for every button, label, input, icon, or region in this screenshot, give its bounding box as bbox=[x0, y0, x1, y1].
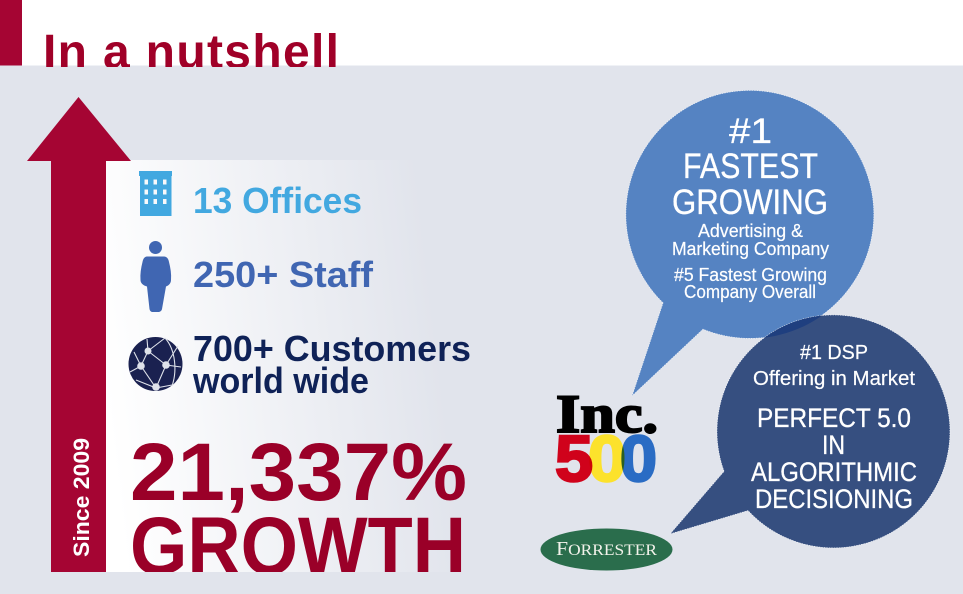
icon: person bbox=[140, 241, 171, 312]
heading: fastest growing: #1 bbox=[729, 112, 772, 151]
heading: perfect score: DECISIONING bbox=[755, 484, 913, 514]
speech bubble: Forrester bbox=[670, 315, 950, 548]
icon: globe bbox=[128, 337, 182, 391]
number 500: 0 bbox=[588, 422, 626, 495]
speech bubble: Inc 500 bbox=[626, 90, 874, 396]
text: award details bbox=[672, 221, 829, 302]
logo: Forrester: FORRESTER bbox=[556, 538, 657, 560]
logo: Inc. 500: Inc. bbox=[556, 384, 658, 444]
arrow: growth bbox=[27, 97, 131, 572]
text: DSP ranking bbox=[753, 342, 915, 390]
text: DSP ranking: #1 DSP bbox=[800, 342, 868, 364]
panel: growth stats bbox=[27, 97, 471, 592]
number 500: 5 bbox=[555, 422, 593, 495]
offices stat: 13 Offices bbox=[193, 180, 362, 221]
number 500 bbox=[555, 422, 657, 495]
heading: fastest growing: FASTEST bbox=[683, 147, 818, 186]
heading: fastest growing: GROWING bbox=[672, 183, 828, 222]
text: award details: Company Overall bbox=[684, 282, 816, 302]
heading: perfect score bbox=[751, 403, 917, 514]
growth figure: GROWTH bbox=[130, 501, 466, 592]
text: award details: #5 Fastest Growing bbox=[674, 265, 827, 285]
heading: perfect score: IN bbox=[822, 430, 845, 460]
title block bbox=[0, 0, 336, 67]
customers stat: world wide bbox=[192, 360, 369, 401]
growth figure bbox=[132, 443, 465, 572]
heading: fastest growing bbox=[672, 112, 828, 222]
growth figure: 21,337% bbox=[130, 427, 467, 518]
heading: perfect score: PERFECT 5.0 bbox=[757, 403, 911, 433]
icon: building bbox=[139, 171, 172, 216]
text: award details: Advertising & bbox=[698, 221, 803, 241]
number 500: 0 bbox=[620, 422, 657, 495]
text: award details: Marketing Company bbox=[672, 239, 829, 259]
text: DSP ranking: Offering in Market bbox=[753, 368, 915, 390]
logo: Forrester bbox=[540, 528, 672, 570]
customers stat bbox=[192, 328, 471, 401]
since label: Since 2009 bbox=[69, 438, 94, 557]
title: In a nutshell bbox=[43, 26, 339, 79]
logo: Inc. 500 bbox=[555, 384, 658, 495]
heading: perfect score: ALGORITHMIC bbox=[751, 457, 917, 487]
staff stat: 250+ Staff bbox=[193, 254, 374, 295]
customers stat: 700+ Customers bbox=[193, 328, 471, 369]
